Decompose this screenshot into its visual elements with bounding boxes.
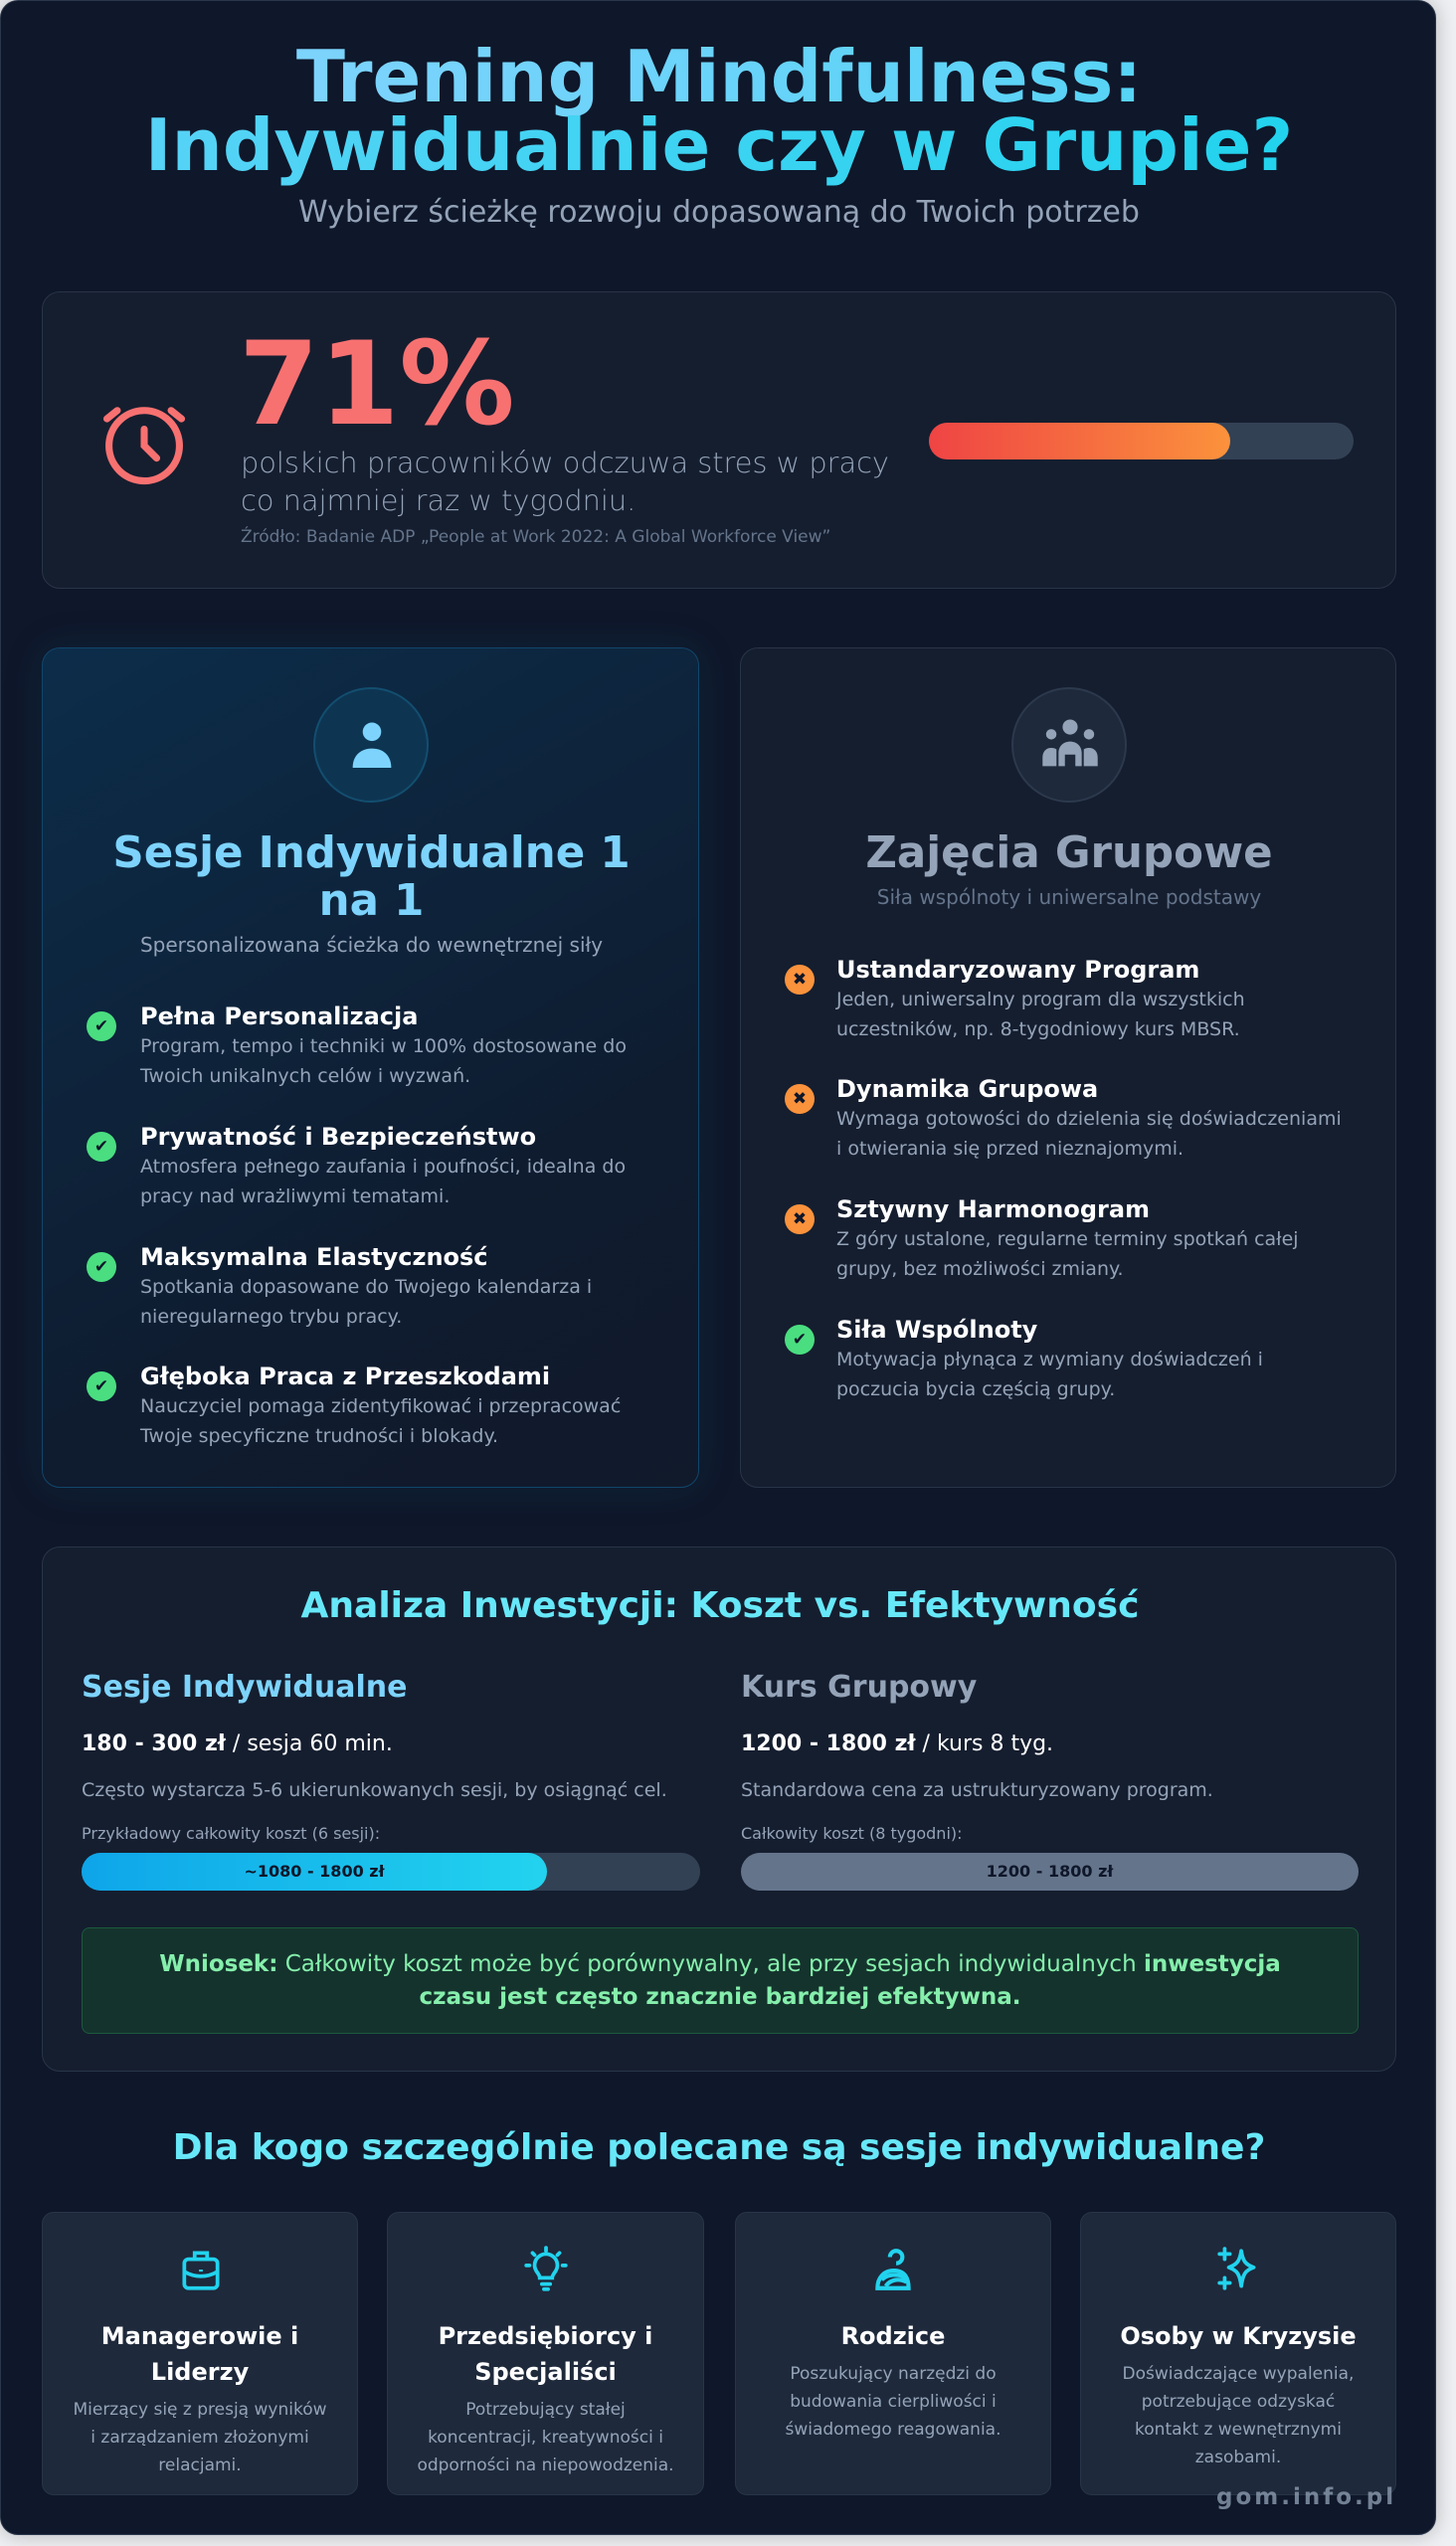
item: deep work: ✔ <box>94 1376 108 1396</box>
item: standardized: Ustandaryzowany Program <box>836 956 1199 984</box>
item: rigid schedule: ✖ <box>793 1209 807 1229</box>
column: individual cost: Przykładowy całkowity koszt (6 sesji): <box>82 1824 380 1843</box>
stat description: polskich pracowników odczuwa stres w pracy <box>241 446 889 479</box>
column: group cost: Całkowity koszt (8 tygodni): <box>741 1824 963 1843</box>
item: personalization <box>87 1002 627 1087</box>
item: group dynamics: Dynamika Grupowa <box>836 1075 1098 1103</box>
item: community: Motywacja płynąca z wymiany doświadczeń i <box>836 1349 1263 1370</box>
watermark: gom.info.pl <box>1216 2484 1396 2510</box>
card: entrepreneurs: Przedsiębiorcy i <box>439 2322 652 2350</box>
card: entrepreneurs: Specjaliści <box>474 2358 617 2386</box>
card: entrepreneurs: koncentracji, kreatywności i <box>428 2428 663 2448</box>
card: parents: Rodzice <box>841 2322 945 2350</box>
subtitle: Wybierz ścieżkę rozwoju dopasowaną do Twoich potrzeb <box>298 195 1140 230</box>
card: managers: Mierzący się z presją wyników <box>73 2400 327 2420</box>
icon: parent <box>875 2249 911 2290</box>
item: standardized: ✖ <box>793 970 807 990</box>
item: deep work <box>87 1363 621 1447</box>
icon: group <box>1011 687 1127 803</box>
title: Indywidualnie czy w Grupie? <box>145 103 1293 187</box>
item: community: Siła Wspólnoty <box>836 1316 1037 1344</box>
card: managers: i zarządzaniem złożonymi <box>91 2428 309 2448</box>
column: group cost: Standardowa cena za ustrukturyzowany program. <box>741 1779 1213 1801</box>
column: individual cost <box>82 1670 700 1891</box>
card: managers: Managerowie i <box>101 2322 298 2350</box>
panel: group classes <box>740 647 1396 1488</box>
item: rigid schedule <box>785 1195 1299 1280</box>
card: parents: Poszukujący narzędzi do <box>790 2364 997 2384</box>
card: crisis: potrzebujące odzyskać <box>1142 2392 1335 2412</box>
item: privacy <box>87 1123 626 1207</box>
bar: individual total <box>82 1853 700 1891</box>
stat number: 71% <box>239 317 515 452</box>
item: deep work: Nauczyciel pomaga zidentyfikować i przepracować <box>140 1395 621 1417</box>
item: group dynamics: Wymaga gotowości do dzielenia się doświadczeniami <box>836 1108 1342 1130</box>
bar: individual total: ~1080 - 1800 zł <box>244 1862 385 1881</box>
column: group cost: Kurs Grupowy <box>741 1670 977 1705</box>
heading: recommended for: Dla kogo szczególnie polecane są sesje indywidualne? <box>173 2127 1265 2168</box>
heading: Sesje Indywidualne 1 <box>112 828 631 878</box>
heading <box>112 828 631 926</box>
item: deep work: Głęboka Praca z Przeszkodami <box>140 1363 550 1390</box>
callout: conclusion: Wniosek: Całkowity koszt może być porównywalny, ale przy sesjach indywidualnych inwestycja <box>159 1951 1281 1977</box>
panel: stat 71% <box>42 291 1396 589</box>
item: community: ✔ <box>793 1330 807 1350</box>
card: managers: Liderzy <box>151 2358 249 2386</box>
card: crisis <box>1080 2212 1396 2495</box>
item: privacy: ✔ <box>94 1137 108 1157</box>
title: Trening Mindfulness: <box>296 35 1142 118</box>
item: flexibility: Maksymalna Elastyczność <box>140 1243 488 1271</box>
item: rigid schedule: grupy, bez możliwości zmiany. <box>836 1258 1124 1280</box>
heading: Analiza Inwestycji: Koszt vs. Efektywność <box>301 1585 1139 1626</box>
item: standardized: uczestników, np. 8-tygodniowy kurs MBSR. <box>836 1018 1240 1040</box>
card: managers: relacjami. <box>158 2455 242 2475</box>
item: privacy: Atmosfera pełnego zaufania i poufności, idealna do <box>140 1156 626 1178</box>
panel: investment analysis <box>42 1546 1396 2072</box>
item: flexibility <box>87 1243 592 1328</box>
item: deep work: Twoje specyficzne trudności i blokady. <box>140 1425 498 1447</box>
subheading: Siła wspólnoty i uniwersalne podstawy <box>877 885 1261 909</box>
icon: sparkles <box>1217 2247 1255 2290</box>
card: managers <box>42 2212 358 2495</box>
item: rigid schedule: Sztywny Harmonogram <box>836 1195 1150 1223</box>
item: privacy: Prywatność i Bezpieczeństwo <box>140 1123 536 1151</box>
column: individual cost: Często wystarcza 5-6 ukierunkowanych sesji, by osiągnąć cel. <box>82 1779 667 1801</box>
source: Źródło: Badanie ADP „People at Work 2022: A Global Workforce View” <box>241 527 830 547</box>
bar: group total <box>741 1853 1359 1891</box>
column: individual cost: 180 - 300 zł / sesja 60 min. <box>82 1731 393 1756</box>
icon: light bulb <box>524 2246 568 2291</box>
card: crisis: Osoby w Kryzysie <box>1120 2322 1357 2350</box>
stat description: co najmniej raz w tygodniu. <box>241 483 636 517</box>
card: crisis: Doświadczające wypalenia, <box>1123 2364 1354 2384</box>
card: parents: świadomego reagowania. <box>785 2420 1001 2440</box>
card: parents <box>735 2212 1051 2495</box>
item: flexibility: Spotkania dopasowane do Twojego kalendarza i <box>140 1276 592 1298</box>
item: privacy: pracy nad wrażliwymi tematami. <box>140 1185 450 1207</box>
title <box>145 35 1293 187</box>
item: personalization: Pełna Personalizacja <box>140 1002 418 1030</box>
item: group dynamics <box>785 1075 1342 1160</box>
subheading: Spersonalizowana ścieżka do wewnętrznej siły <box>140 933 603 957</box>
bar: group total: 1200 - 1800 zł <box>987 1862 1113 1881</box>
card: entrepreneurs <box>387 2212 704 2495</box>
icon: person <box>313 687 429 803</box>
item: personalization: Twoich unikalnych celów i wyzwań. <box>140 1065 470 1087</box>
item: personalization: ✔ <box>94 1016 108 1036</box>
item: group dynamics: ✖ <box>793 1089 807 1109</box>
card: crisis: zasobami. <box>1195 2448 1281 2467</box>
icon: briefcase <box>182 2252 220 2290</box>
callout: conclusion <box>82 1927 1359 2034</box>
item: flexibility: nieregularnego trybu pracy. <box>140 1306 402 1328</box>
item: standardized <box>785 956 1245 1040</box>
item: community <box>785 1316 1263 1400</box>
icon: alarm clock <box>103 407 185 485</box>
panel: individual sessions <box>42 647 699 1488</box>
item: personalization: Program, tempo i techniki w 100% dostosowane do <box>140 1035 627 1057</box>
item: group dynamics: i otwierania się przed nieznajomymi. <box>836 1138 1183 1160</box>
card: parents: budowania cierpliwości i <box>790 2392 997 2412</box>
callout: conclusion: czasu jest często znacznie bardziej efektywna. <box>420 1984 1020 2010</box>
heading: na 1 <box>319 876 424 926</box>
card: entrepreneurs: odporności na niepowodzenia. <box>417 2455 674 2475</box>
stat description <box>241 446 889 517</box>
item: community: poczucia bycia częścią grupy. <box>836 1378 1115 1400</box>
column: group cost: 1200 - 1800 zł / kurs 8 tyg. <box>741 1731 1053 1756</box>
item: rigid schedule: Z góry ustalone, regularne terminy spotkań całej <box>836 1228 1299 1250</box>
progress bar 71% <box>929 423 1354 459</box>
column: group cost <box>741 1670 1359 1891</box>
heading: Zajęcia Grupowe <box>865 828 1273 878</box>
column: individual cost: Sesje Indywidualne <box>82 1670 408 1705</box>
card: crisis: kontakt z wewnętrznymi <box>1135 2420 1342 2440</box>
item: standardized: Jeden, uniwersalny program dla wszystkich <box>836 989 1245 1010</box>
item: flexibility: ✔ <box>94 1257 108 1277</box>
card: entrepreneurs: Potrzebujący stałej <box>465 2400 626 2420</box>
